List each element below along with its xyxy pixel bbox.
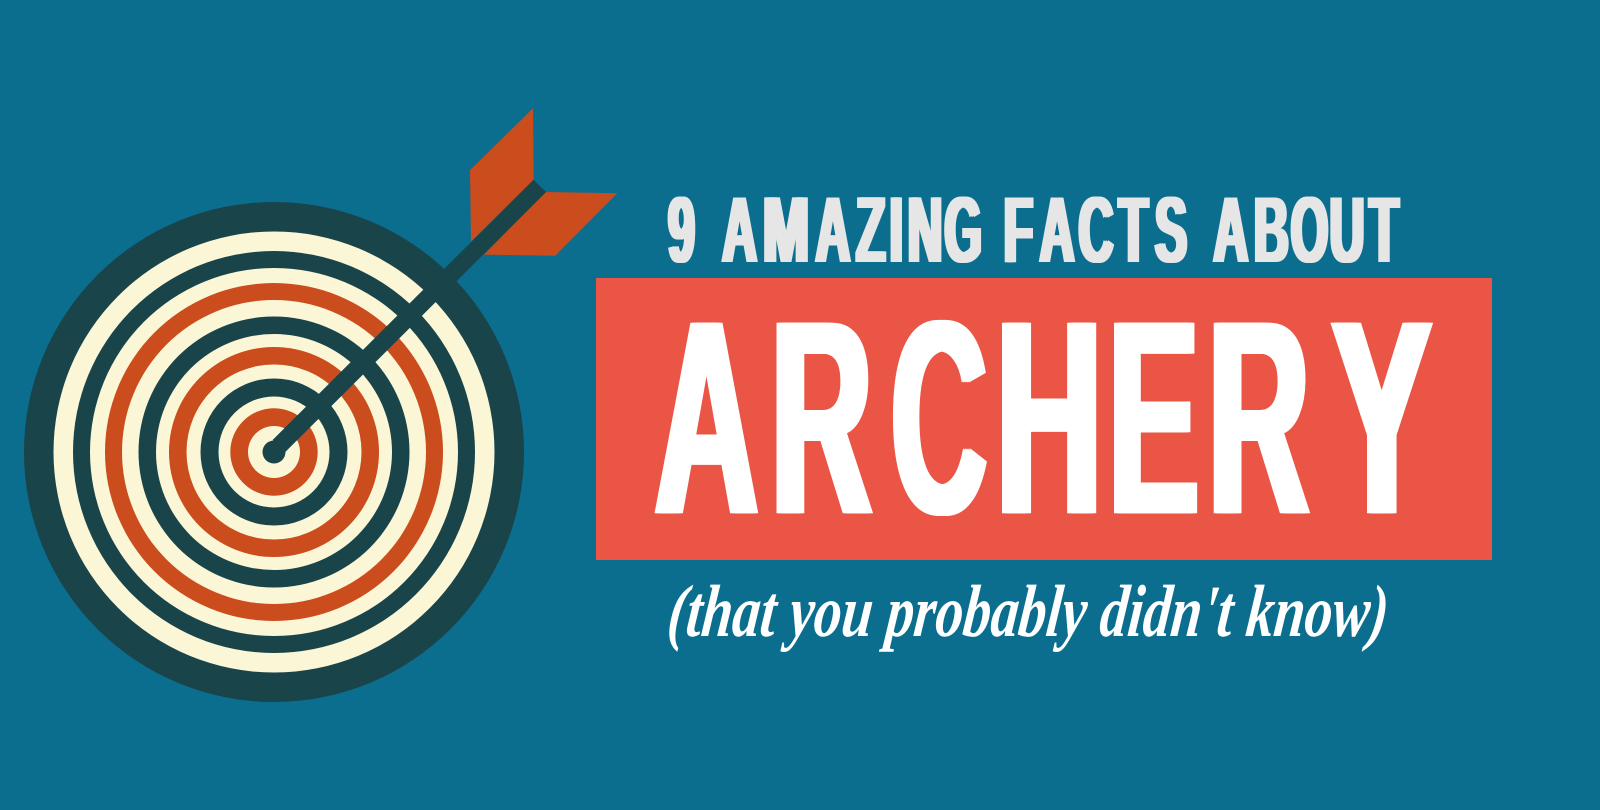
icon: arrow bbox=[273, 108, 617, 452]
title: archery: R bbox=[771, 262, 872, 572]
heading: 9 amazing facts about: AZING FACTS ABOUT bbox=[816, 178, 1399, 282]
title: archery: E bbox=[1109, 262, 1199, 572]
title: archery: Y bbox=[1332, 262, 1432, 572]
title: archery: R bbox=[1208, 262, 1309, 572]
heading: 9 amazing facts about: 9 A bbox=[668, 178, 757, 282]
icon: archery target bbox=[24, 202, 524, 702]
title banner: red panel bbox=[596, 278, 1492, 560]
title: archery: A bbox=[655, 262, 758, 572]
title: archery: H bbox=[996, 262, 1102, 572]
title: archery: C bbox=[891, 262, 987, 572]
heading: 9 amazing facts about: M bbox=[763, 178, 809, 282]
